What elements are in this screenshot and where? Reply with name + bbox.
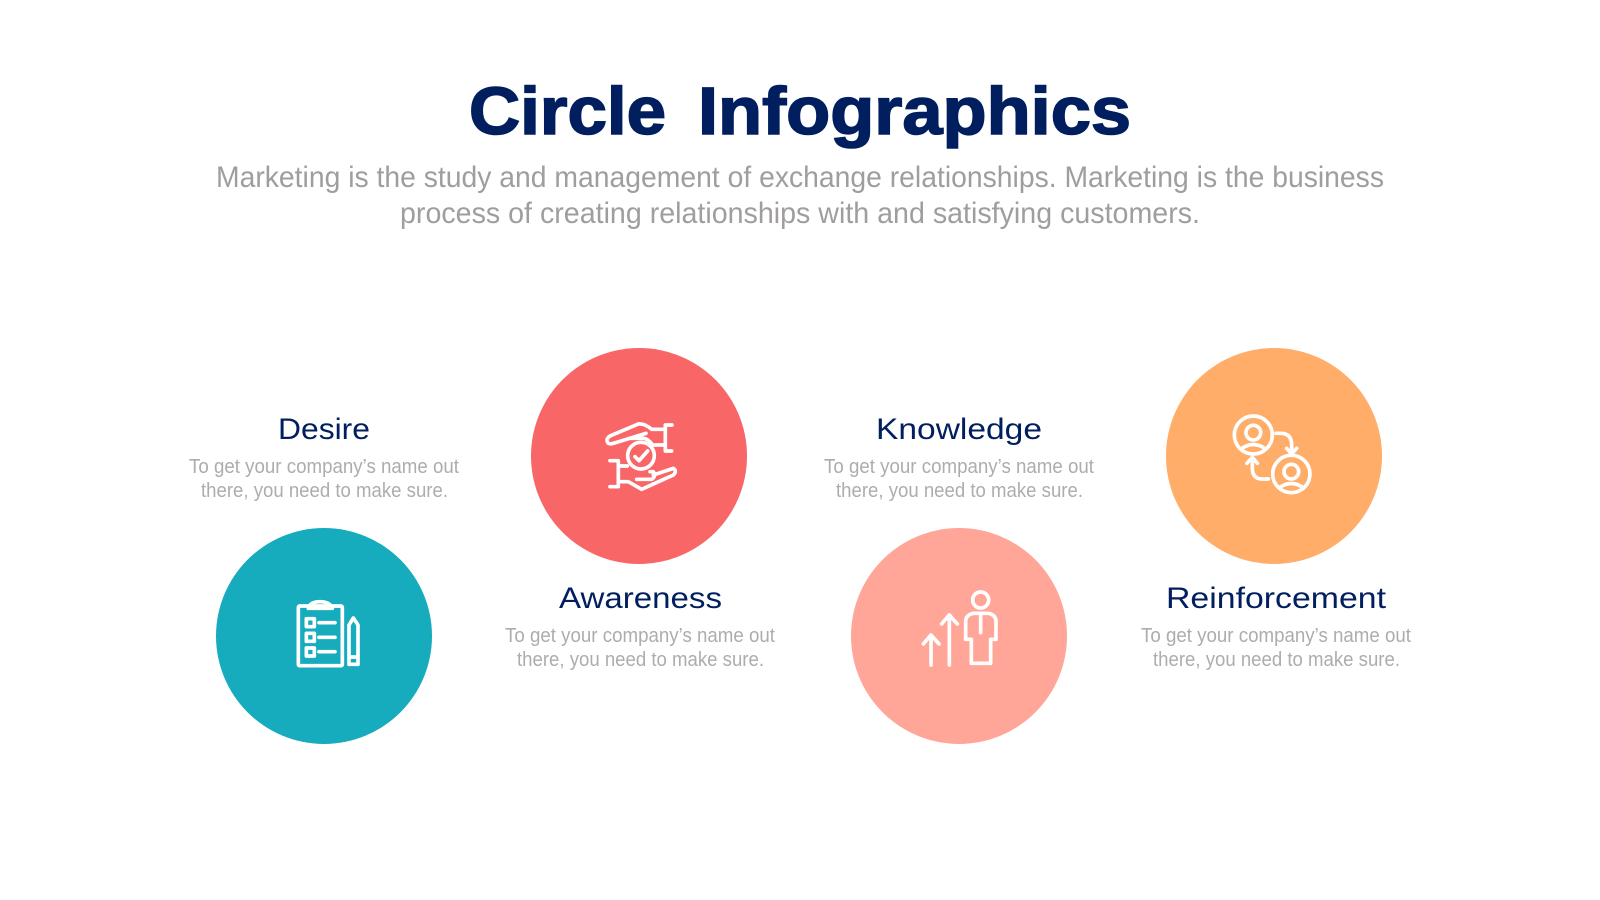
heading: awareness: Awareness — [559, 582, 722, 615]
text: reinforcement description: To get your company’s name out — [1141, 625, 1411, 647]
heading: knowledge: Knowledge — [876, 413, 1042, 446]
text: awareness description: there, you need to make sure. — [517, 649, 764, 671]
panel: desire — [189, 413, 459, 744]
circle: desire — [216, 528, 432, 744]
circle: awareness — [531, 348, 747, 564]
text: desire description — [189, 456, 459, 502]
title: Infographics — [698, 74, 1131, 149]
title — [469, 74, 1131, 149]
subtitle: Marketing is the study and management of exchange relationships. Marketing is the business — [216, 161, 1384, 194]
text: knowledge description: there, you need to make sure. — [836, 480, 1083, 502]
panel: knowledge — [824, 413, 1094, 744]
subtitle — [216, 161, 1384, 230]
icon: people exchange — [1234, 416, 1310, 493]
text: knowledge description — [824, 456, 1094, 502]
text: knowledge description: To get your company’s name out — [824, 456, 1094, 478]
text: desire description: To get your company’s name out — [189, 456, 459, 478]
subtitle: process of creating relationships with and satisfying customers. — [400, 197, 1200, 230]
circle: reinforcement — [1166, 348, 1382, 564]
panel: reinforcement — [1141, 348, 1411, 671]
title: Circle — [469, 74, 666, 149]
circle: knowledge — [851, 528, 1067, 744]
text: awareness description — [505, 625, 775, 671]
heading: desire: Desire — [278, 413, 370, 446]
heading: reinforcement: Reinforcement — [1166, 582, 1387, 615]
text: awareness description: To get your company’s name out — [505, 625, 775, 647]
text: reinforcement description — [1141, 625, 1411, 671]
icon: hands holding check — [607, 424, 675, 489]
text: reinforcement description: there, you need to make sure. — [1153, 649, 1400, 671]
icon: clipboard and pencil — [298, 602, 358, 666]
icon: person with growth arrows — [923, 592, 996, 665]
text: desire description: there, you need to make sure. — [201, 480, 448, 502]
panel: awareness — [505, 348, 775, 671]
